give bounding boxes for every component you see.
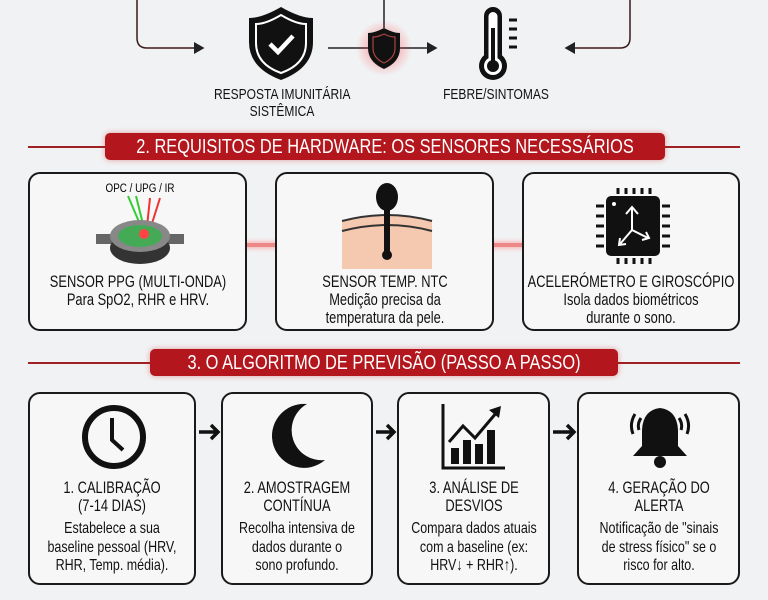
panel: PPG sensor: SENSOR PPG (MULTI-ONDA) [49, 273, 226, 291]
panel: PPG sensor: Para SpO2, RHR e HRV. [66, 291, 209, 309]
icon: bell [630, 408, 690, 468]
panel: step 3: HRV↓ + RHR↑). [430, 557, 517, 574]
heading: section 3: 3. O ALGORITMO DE PREVISÃO (PASSO A PASSO) [187, 351, 581, 374]
icon: ppg sensor: OPC / UPG / IR [106, 182, 174, 195]
arrow: middle [328, 0, 436, 48]
panel: step 2: CONTÍNUA [263, 497, 331, 515]
icon: chip [596, 188, 670, 264]
panel: step 2 [221, 392, 373, 585]
panel: PPG sensor [28, 172, 247, 331]
icon: shield check [249, 7, 313, 80]
panel: step 1 [28, 392, 196, 585]
panel: step 2: 2. AMOSTRAGEM [244, 479, 350, 497]
label: resposta imunitária: RESPOSTA IMUNITÁRIA [214, 86, 350, 103]
icon: ppg sensor [96, 182, 184, 264]
panel: step 4: ALERTA [634, 497, 683, 515]
icon: skin thermistor [342, 183, 432, 269]
arrows between steps [199, 424, 576, 440]
connector glow lines [245, 243, 525, 247]
panel: step 3: 3. ANÁLISE DE [429, 479, 518, 497]
panel: step 2: sono profundo. [255, 557, 339, 574]
flow diagram top [136, 0, 631, 80]
arrow: left line [137, 0, 203, 48]
label: febre: FEBRE/SINTOMAS [443, 86, 549, 103]
panel: NTC sensor: Medição precisa da [329, 291, 440, 309]
panel: step 1: Estabelece a sua [64, 520, 160, 537]
panel: step 2: Recolha intensiva de [239, 520, 355, 537]
panel: NTC sensor: SENSOR TEMP. NTC [322, 273, 447, 291]
icon: moon [272, 404, 325, 468]
panel: step 1: (7-14 DIAS) [78, 497, 146, 515]
panel: accelerometer: durante o sono. [586, 309, 676, 327]
panel: step 4: risco for alto. [623, 557, 694, 574]
panel: step 4: 4. GERAÇÃO DO [608, 479, 709, 497]
panel: step 1: baseline pessoal (HRV, [47, 538, 177, 556]
panel: step 3: DESVIOS [445, 497, 502, 515]
panel: accelerometer: ACELERÓMETRO E GIROSCÓPIO [528, 273, 734, 291]
panel: accelerometer [522, 172, 740, 331]
icon: thermometer [479, 7, 517, 80]
icon: small shield glow [356, 20, 412, 76]
panel: step 4 [577, 392, 740, 585]
panel: accelerometer: Isola dados biométricos [563, 291, 699, 309]
heading: section 2: 2. REQUISITOS DE HARDWARE: OS SENSORES NECESSÁRIOS [136, 135, 634, 158]
panel: step 3: Compara dados atuais [411, 520, 536, 537]
panel: step 4: Notificação de "sinais [599, 520, 718, 537]
icon: chart [442, 404, 505, 470]
panel: step 3 [397, 392, 550, 585]
panel: step 3: com a baseline (ex: [419, 538, 528, 556]
panel: step 1: 1. CALIBRAÇÃO [63, 479, 161, 497]
icon: clock [82, 405, 146, 469]
label: resposta imunitária [214, 86, 350, 120]
panel: step 4: de stress físico" se o [601, 538, 716, 556]
panel: NTC sensor: temperatura da pele. [325, 309, 444, 327]
label: resposta imunitária: SISTÊMICA [250, 103, 314, 120]
panel: NTC sensor [275, 172, 494, 331]
panel: step 2: dados durante o [252, 538, 342, 556]
panel: step 1: RHR, Temp. média). [56, 557, 168, 574]
arrow: right line [566, 0, 630, 48]
